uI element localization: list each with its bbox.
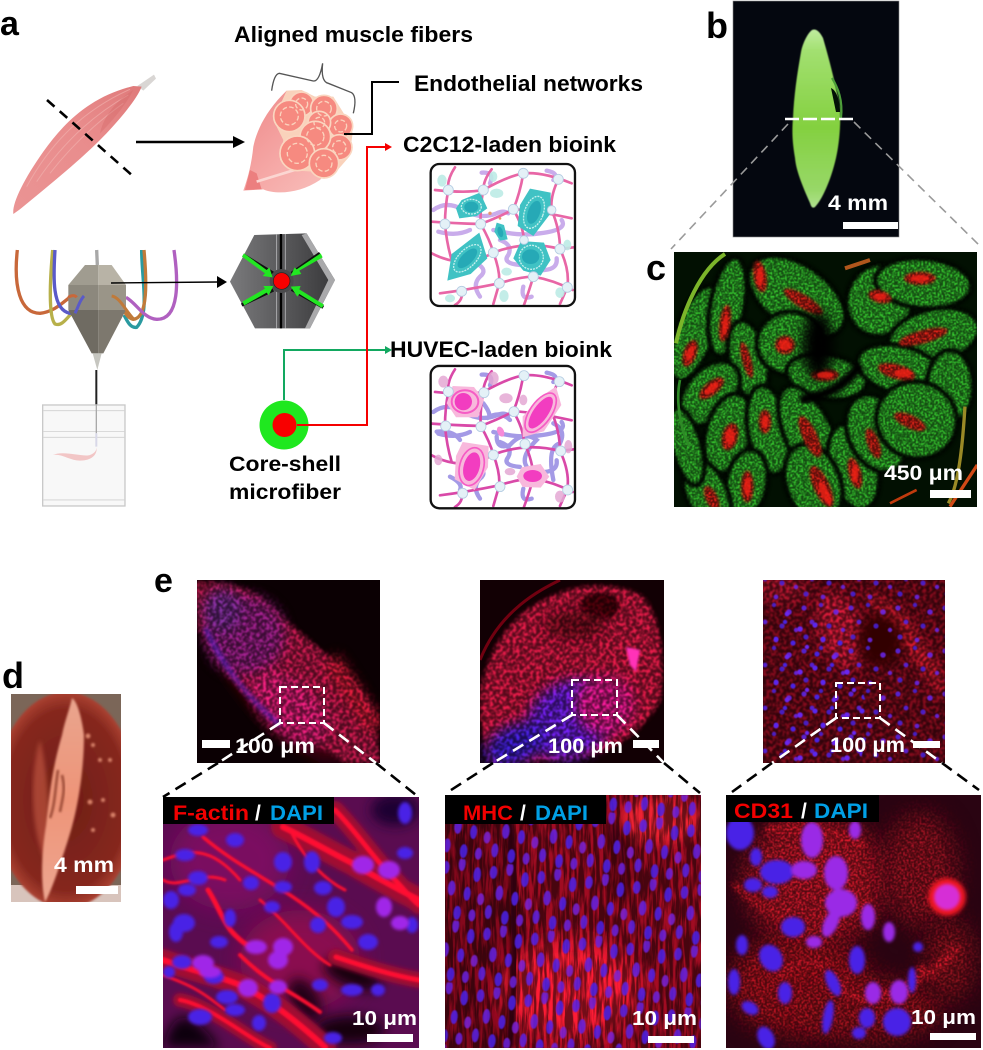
scale: 10 um: 10 μm [632,1008,697,1030]
heading: C2C12 bioink: C2C12-laden bioink [403,132,617,157]
icon: fiber bundle cross-section [243,63,355,192]
micrograph background [674,252,977,507]
icon: multi-channel print head [16,250,177,405]
zoom lines inside overviews [218,715,942,763]
icon: printing bath container [43,405,125,506]
scale: 450 um [884,462,971,498]
scale bars: 100 um overviews: 100 μm [830,734,905,757]
panel d: tissue in dish photo [4,662,121,902]
scale bars: 100 um overviews: 100 μm [548,735,623,758]
connector: endothelial networks [344,82,399,134]
label d: d [2,655,24,696]
panel e: immunofluorescence micrographs [154,562,981,1050]
dashed section line [785,118,854,120]
scale: 4 mm [828,192,898,229]
dish photo [11,694,121,902]
panel a: bioprinting schematic [0,5,643,508]
panel b: green fluorescent construct [671,1,979,249]
label a: a [0,5,20,43]
scale: 10 um [911,1007,976,1040]
label: F-actin / DAPI [163,797,334,825]
label: CD31 / DAPI: / [801,800,807,823]
panel: C2C12-laden bioink [431,164,575,306]
green spindle construct [792,29,841,208]
label e: e [154,562,173,600]
icon: nozzle cross-section [230,233,335,328]
scale: 4 mm: 4 mm [828,192,888,215]
arrow: core to C2C12 bioink [297,143,392,425]
scale: 10 um: 10 μm [352,1008,417,1030]
scale bars: 100 um overviews: 100 μm [235,735,315,758]
label: MHC / DAPI: DAPI [535,802,588,825]
zoom lines outside overviews [163,763,979,797]
label: MHC / DAPI: MHC [463,802,513,825]
arrow: muscle to bundle [136,136,245,148]
micrograph fibers [674,252,977,507]
panel: HUVEC-laden bioink [431,366,575,508]
heading: endothelial networks: Endothelial networks [414,71,643,96]
label: CD31 / DAPI: DAPI [814,800,868,823]
label: MHC / DAPI [445,795,606,825]
label: MHC / DAPI: / [520,802,526,825]
micrograph: MHC zoom [445,795,701,1048]
scale: 10 um [632,1008,697,1043]
dashed cut line [47,100,134,177]
label: CD31 / DAPI: CD31 [734,800,793,823]
photo background [733,1,899,237]
micrograph: MHC overview [478,580,664,778]
heading: HUVEC bioink: HUVEC-laden bioink [390,337,613,362]
scale: 10 um [352,1008,417,1042]
label: CD31 / DAPI [726,795,879,823]
micrograph: F-actin overview [197,580,380,763]
inset boxes on overview micrographs [280,680,880,723]
icon: whole muscle [13,75,156,214]
label: F-actin / DAPI: F-actin [173,802,249,825]
panel c: cross-section fluorescence [647,252,977,507]
micrograph: CD31 overview [763,580,945,763]
zoom lines to panel c [671,122,979,249]
arrow: shell to HUVEC bioink [284,346,392,400]
micrograph: F-actin zoom [163,794,419,1048]
icon: core-shell microfiber [260,400,308,450]
label c: c [646,247,666,288]
scale bars: 100 um overviews [202,734,940,758]
scale: 10 um: 10 μm [911,1007,976,1029]
label: F-actin / DAPI: / [255,802,261,825]
scale: 4 mm: 4 mm [54,854,114,877]
heading: aligned muscle fibers: Aligned muscle fibers [234,22,473,47]
scale: 4 mm [54,854,118,894]
label: core-shell microfiber: microfiber [229,481,341,504]
label: core-shell microfiber: Core-shell [229,453,341,476]
label b: b [706,5,728,46]
micrograph: CD31 zoom [726,795,981,1050]
scale: 450 um: 450 μm [884,462,963,485]
arrow: print head to nozzle cross-section [111,276,227,288]
label: F-actin / DAPI: DAPI [270,802,323,825]
label: core-shell microfiber [229,453,341,504]
